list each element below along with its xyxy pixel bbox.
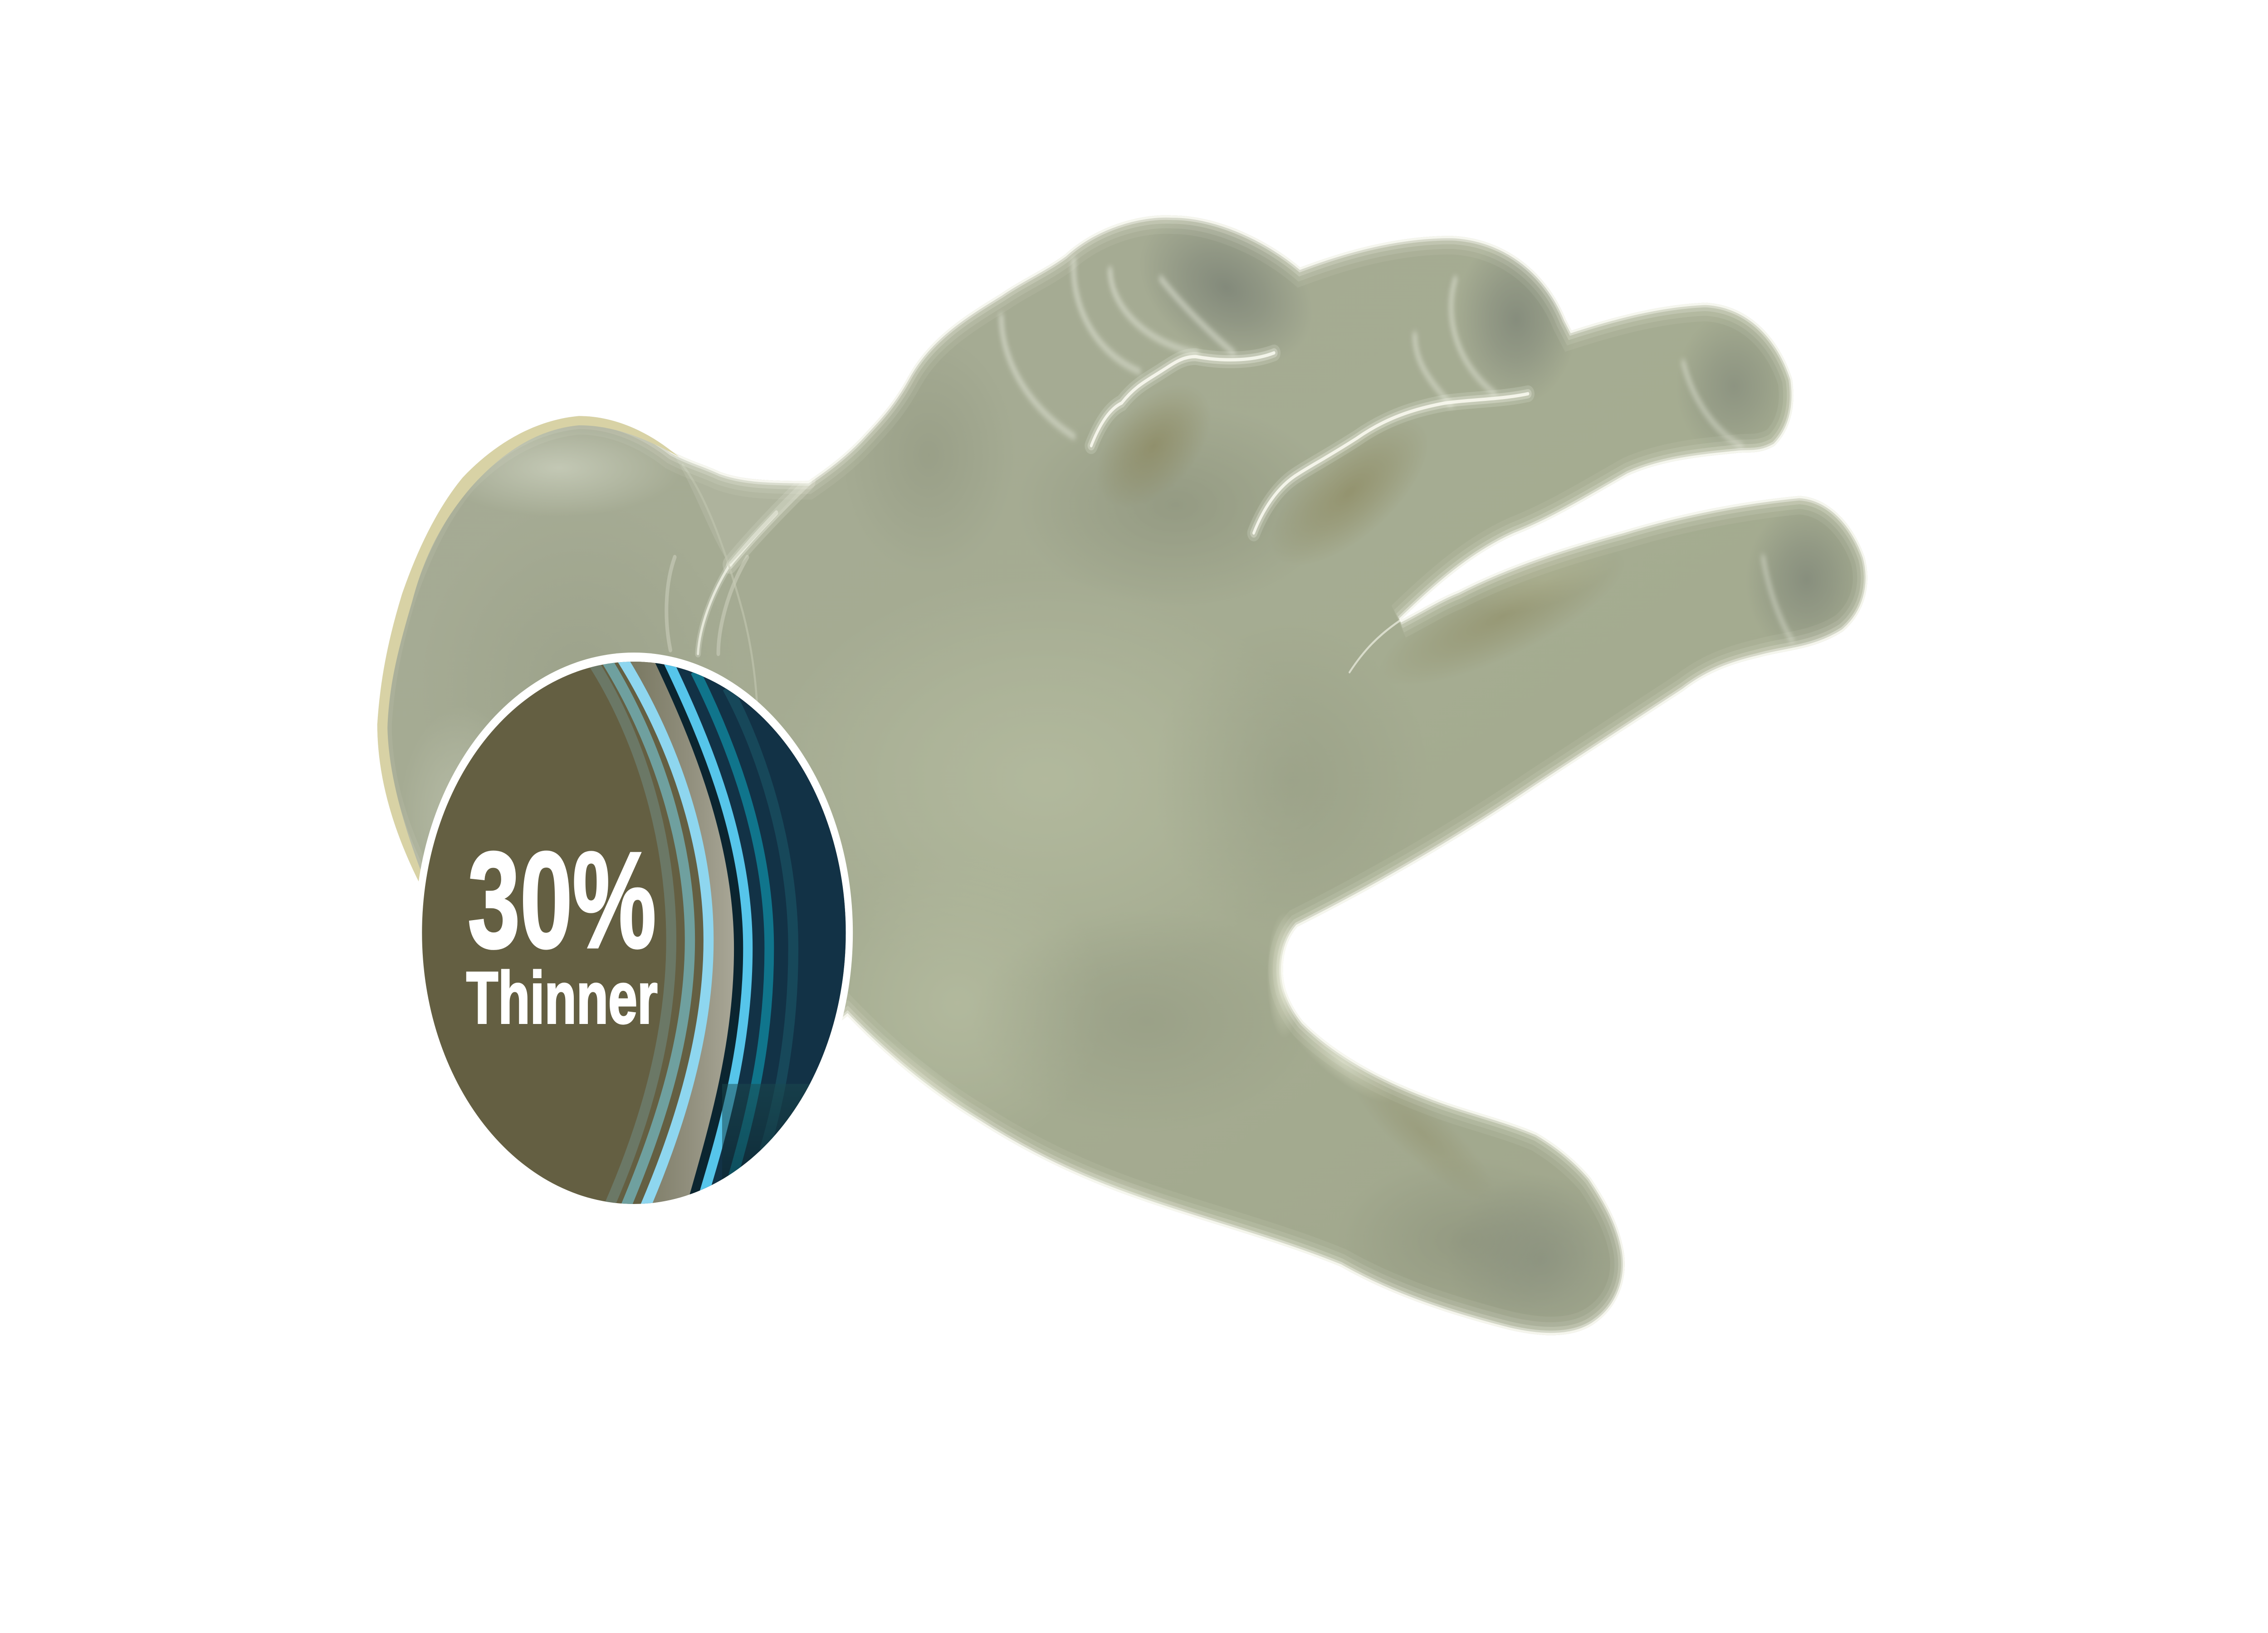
finger tips <box>1123 182 1867 1345</box>
cuff rim <box>377 416 679 901</box>
cuff fold <box>672 451 808 565</box>
third finger wrinkle <box>1683 362 1741 446</box>
lower shaded strip <box>722 1084 858 1214</box>
palm and back-of-hand shading <box>399 334 1596 1324</box>
crease highlights <box>1091 353 1528 673</box>
callout ring <box>415 653 853 1213</box>
glove silhouette <box>377 215 1867 1335</box>
wrist wrinkles <box>666 481 808 654</box>
rim glow along glove edge <box>377 215 1867 1335</box>
infographic: glove with thinner callout <box>377 215 1867 1335</box>
outer dark layer <box>653 657 856 1211</box>
grey membrane <box>626 657 735 1211</box>
fourth finger wrinkle <box>1763 557 1792 641</box>
lower thumb and palm edge glow <box>901 922 1378 1191</box>
callout: 30% thinner cross-section <box>415 653 858 1214</box>
second finger wrinkles <box>1415 278 1495 405</box>
inner translucent bands <box>593 663 671 1208</box>
inner skin area <box>418 658 850 1211</box>
callout layers <box>418 657 858 1214</box>
glove <box>377 182 1867 1345</box>
outer blue bands <box>658 657 739 1199</box>
warm shadows at finger bases <box>1079 358 1636 1221</box>
translucent cuff overlap <box>682 464 758 799</box>
callout label: Thinner <box>466 956 658 1039</box>
callout figure: 30% <box>468 824 656 977</box>
first finger wrinkles <box>1001 260 1233 436</box>
